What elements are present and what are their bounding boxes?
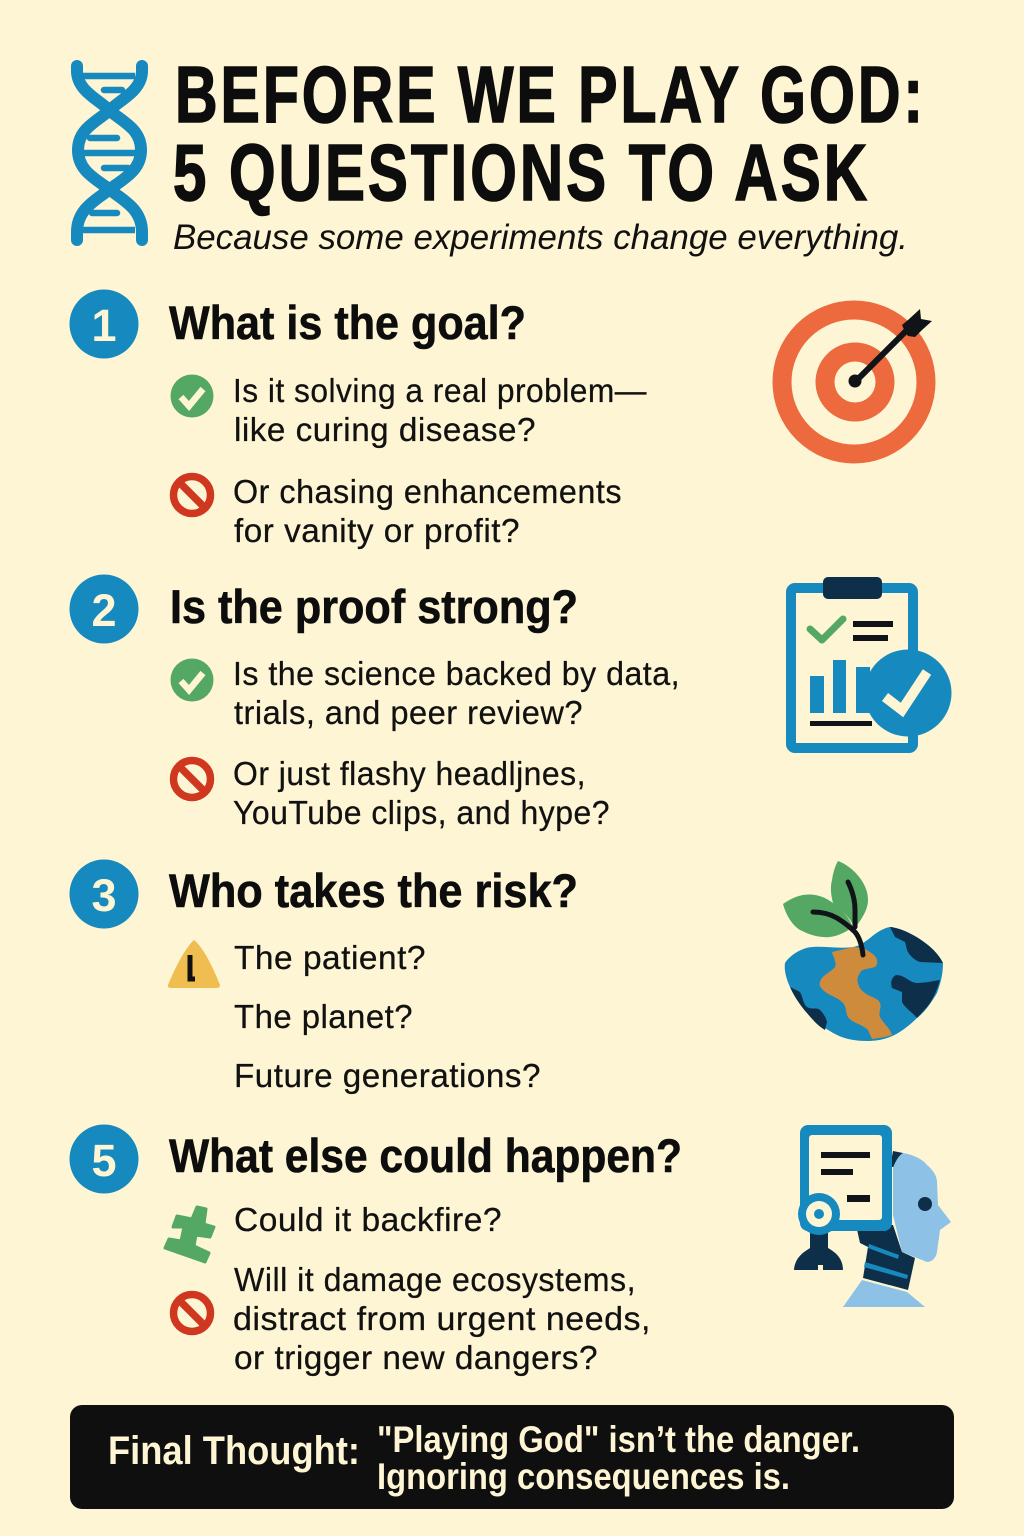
final thought quote: [377, 1419, 860, 1497]
number badge 5: [70, 1124, 138, 1194]
text: ecosystems: distract from urgent needs,: [233, 1300, 651, 1337]
number badge 1: 1: [91, 300, 117, 351]
icon: prohibited sign: [174, 476, 210, 514]
icon: clipboard with chart and check: [791, 577, 952, 748]
heading: what is the goal: What is the goal?: [169, 296, 526, 349]
text: could it backfire: Could it backfire?: [234, 1201, 502, 1238]
callout: final thought: [70, 1405, 954, 1509]
text: real problem: [233, 372, 647, 448]
icon: green check: [170, 658, 214, 702]
title: [173, 50, 926, 217]
text: science backed: trials, and peer review?: [234, 694, 583, 731]
number badge 3: [70, 860, 138, 928]
text: ecosystems: [233, 1261, 651, 1376]
heading: who takes the risk: Who takes the risk?: [169, 864, 578, 917]
text: enhancements: [233, 473, 622, 549]
icon: robot head with document: [794, 1125, 951, 1307]
panel: question 2: [70, 574, 680, 831]
number badge 1: [70, 290, 138, 358]
final thought quote: "Playing God" isn’t the danger.: [377, 1419, 860, 1460]
text: flashy headlines: Or just flashy headljnes,: [233, 755, 586, 792]
number badge 3: 3: [91, 870, 117, 921]
panel: question 5: [70, 1124, 682, 1376]
final thought label: Final Thought:: [108, 1429, 360, 1473]
text: flashy headlines: YouTube clips, and hype?: [233, 794, 610, 831]
text: future generations: Future generations?: [234, 1057, 541, 1094]
text: enhancements: for vanity or profit?: [234, 512, 520, 549]
panel: question 3: [70, 860, 578, 1094]
heading: what else could happen: What else could happen?: [169, 1129, 682, 1182]
icon: puzzle piece: [165, 1207, 214, 1262]
text: the patient: The patient?: [234, 939, 426, 976]
text: ecosystems: or trigger new dangers?: [234, 1339, 598, 1376]
icon: prohibited sign: [174, 1294, 210, 1332]
icon: DNA helix: [77, 66, 142, 240]
text: real problem: like curing disease?: [234, 411, 536, 448]
text: science backed: Is the science backed by data,: [233, 655, 680, 692]
icon: prohibited sign: [174, 760, 210, 798]
text: the planet: The planet?: [234, 998, 413, 1035]
text: real problem: Is it solving a real problem—: [233, 372, 647, 409]
icon: target with arrow: [782, 309, 932, 454]
text: ecosystems: Will it damage ecosystems,: [234, 1261, 636, 1298]
number badge 5: 5: [91, 1135, 117, 1186]
number badge 2: [70, 574, 138, 644]
subtitle: Because some experiments change everything.: [173, 218, 908, 257]
number badge 2: 2: [91, 585, 117, 636]
icon: green check: [170, 374, 214, 418]
panel: question 1: [70, 290, 647, 549]
text: science backed: [233, 655, 680, 731]
heading: is the proof strong: Is the proof strong?: [170, 580, 578, 633]
icon: apple-shaped globe with leaves: [783, 861, 943, 1041]
text: flashy headlines: [233, 755, 610, 831]
text: enhancements: Or chasing enhancements: [233, 473, 622, 510]
final thought quote: Ignoring consequences is.: [377, 1456, 790, 1497]
icon: warning triangle: [168, 940, 220, 988]
